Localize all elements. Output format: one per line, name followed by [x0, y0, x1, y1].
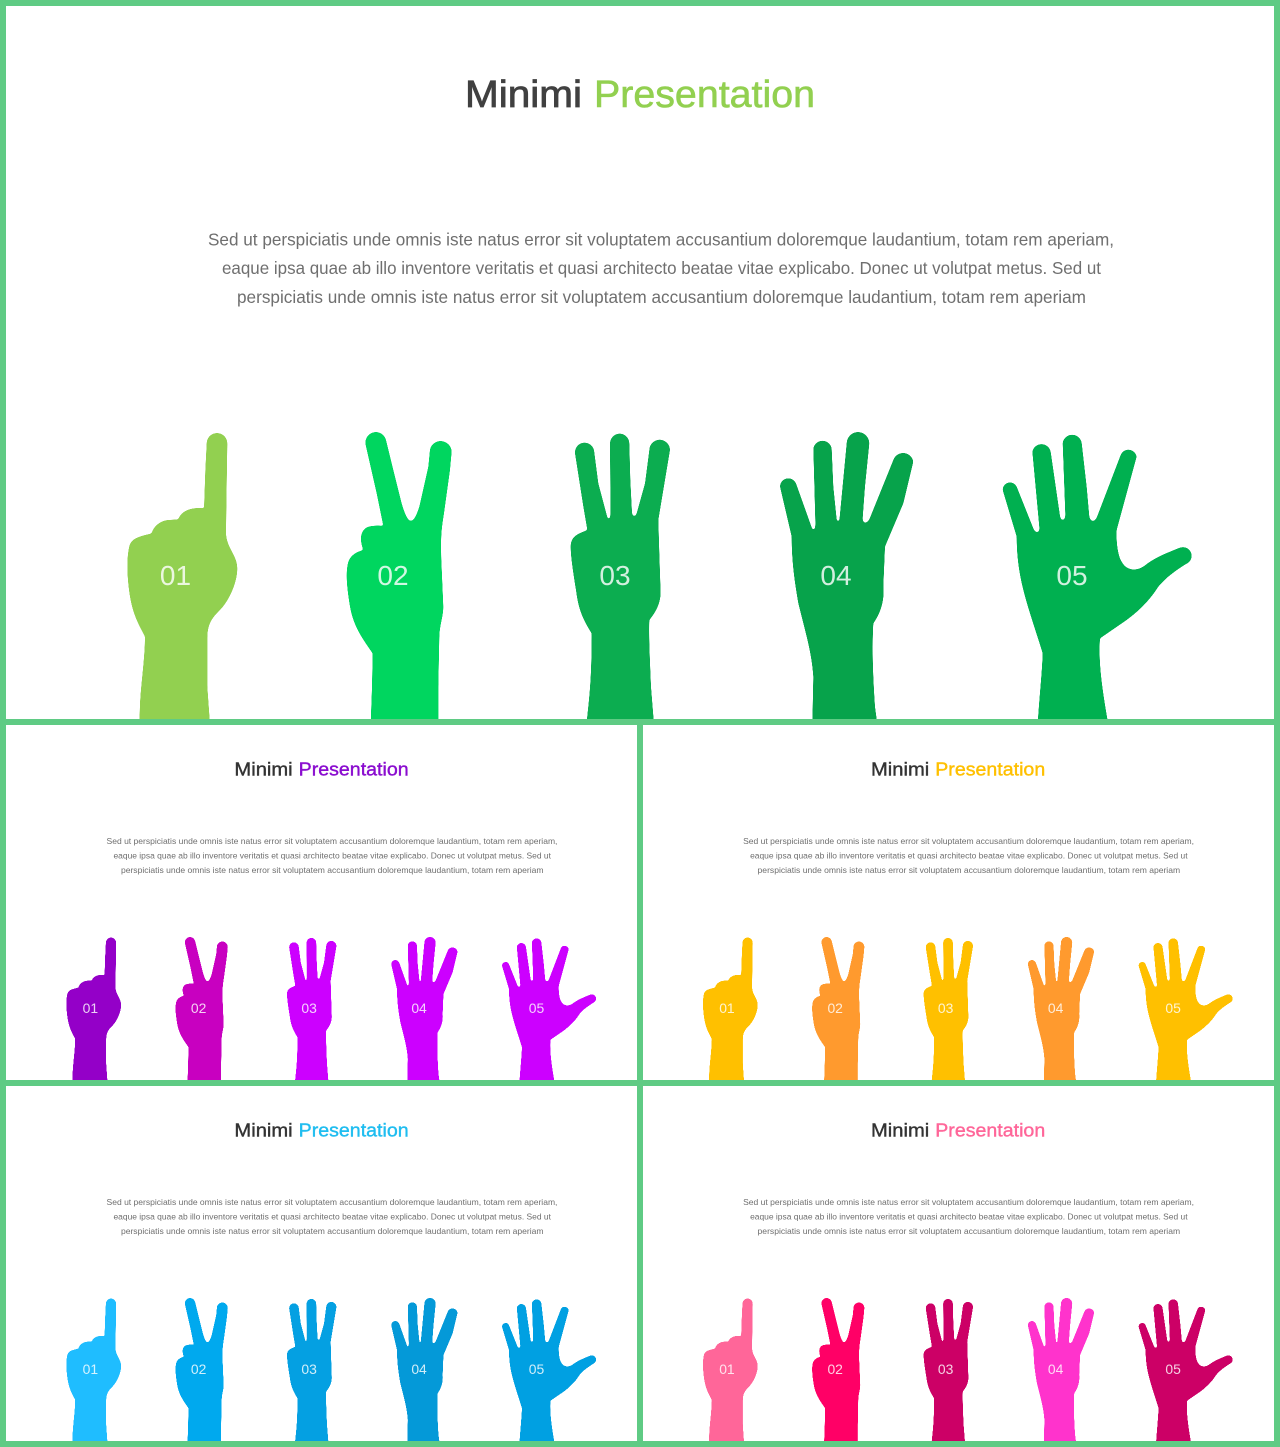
hand 01: 01 — [83, 1000, 98, 1016]
hand 03: 03 — [938, 1000, 954, 1016]
hand 02 — [347, 432, 452, 724]
hand 04: 04 — [411, 1361, 427, 1377]
hand 01 — [66, 938, 121, 1082]
hand 01 — [66, 1299, 121, 1443]
hand 02: 02 — [827, 1361, 843, 1377]
title — [465, 74, 815, 116]
title: Minimi — [871, 1120, 929, 1141]
hand 04 — [391, 937, 458, 1082]
body text: perspiciatis unde omnis iste natus error sit voluptatem accusantium doloremque laudantium, totam rem aperiam — [237, 287, 1086, 307]
hand 04 — [1028, 937, 1094, 1082]
body text: perspiciatis unde omnis iste natus error sit voluptatem accusantium doloremque laudantium, totam rem aperiam — [758, 1226, 1180, 1236]
hand 02: 02 — [191, 1361, 207, 1377]
body text: Sed ut perspiciatis unde omnis iste natus error sit voluptatem accusantium doloremque laudantium, totam rem aperiam, — [743, 1197, 1194, 1207]
hand 04: 04 — [411, 1000, 427, 1016]
body text: perspiciatis unde omnis iste natus error sit voluptatem accusantium doloremque laudantium, totam rem aperiam — [121, 1226, 544, 1236]
title — [871, 1120, 1045, 1141]
hand 05 — [1139, 1299, 1233, 1443]
hand 05: 05 — [1056, 560, 1088, 591]
hand 02 — [176, 1298, 228, 1443]
hand 01 — [703, 1299, 758, 1443]
hand 02: 02 — [827, 1000, 843, 1016]
hand 05: 05 — [1165, 1000, 1181, 1016]
title: Minimi — [871, 759, 929, 780]
body text: Sed ut perspiciatis unde omnis iste natus error sit voluptatem accusantium doloremque laudantium, totam rem aperiam, — [107, 1197, 557, 1207]
hand 05 — [1003, 435, 1192, 724]
hand 04 — [780, 432, 913, 724]
hand 05: 05 — [529, 1000, 545, 1016]
body text: perspiciatis unde omnis iste natus error sit voluptatem accusantium doloremque laudantium, totam rem aperiam — [758, 865, 1180, 875]
hand 03: 03 — [599, 560, 631, 591]
panel: purple slide — [66, 759, 596, 1082]
hand 01 — [703, 938, 758, 1082]
hand 05 — [502, 1299, 596, 1443]
body text — [107, 836, 557, 875]
hand 03: 03 — [301, 1000, 317, 1016]
body text: eaque ipsa quae ab illo inventore veritatis et quasi architecto beatae vitae explicabo. Donec ut volutpat metus. Sed ut — [113, 850, 552, 860]
hand 04 — [1028, 1298, 1094, 1443]
title: Presentation — [594, 74, 815, 116]
hand 03 — [287, 938, 336, 1082]
hand 02 — [812, 1298, 864, 1443]
hand 03 — [287, 1299, 336, 1443]
hand 02 — [176, 937, 228, 1082]
panel: main green slide — [127, 74, 1192, 724]
hand 01: 01 — [83, 1361, 98, 1377]
title — [871, 759, 1045, 780]
body text: Sed ut perspiciatis unde omnis iste natus error sit voluptatem accusantium doloremque laudantium, totam rem aperiam, — [107, 836, 557, 846]
hand 05: 05 — [529, 1361, 545, 1377]
hand 04 — [391, 1298, 458, 1443]
hand 03: 03 — [301, 1361, 317, 1377]
title: Presentation — [935, 759, 1045, 780]
hand 02: 02 — [377, 560, 409, 591]
panel: blue slide — [66, 1120, 596, 1443]
title — [234, 1120, 409, 1141]
body text: eaque ipsa quae ab illo inventore veritatis et quasi architecto beatae vitae explicabo. Donec ut volutpat metus. Sed ut — [113, 1211, 552, 1221]
hand 03 — [571, 434, 670, 724]
title: Minimi — [234, 759, 293, 780]
hand 01: 01 — [719, 1361, 735, 1377]
body text — [743, 1197, 1194, 1236]
body text: eaque ipsa quae ab illo inventore veritatis et quasi architecto beatae vitae explicabo. Donec ut volutpat metus. Sed ut — [222, 258, 1101, 278]
title: Minimi — [465, 74, 582, 116]
hand 04: 04 — [1048, 1361, 1064, 1377]
hand 01: 01 — [160, 560, 191, 591]
hand 01: 01 — [719, 1000, 735, 1016]
title: Presentation — [299, 759, 409, 780]
hand 04: 04 — [820, 560, 852, 591]
hand 03: 03 — [938, 1361, 954, 1377]
hand 02 — [812, 937, 864, 1082]
body text — [743, 836, 1194, 875]
body text: Sed ut perspiciatis unde omnis iste natus error sit voluptatem accusantium doloremque laudantium, totam rem aperiam, — [743, 836, 1194, 846]
title — [234, 759, 409, 780]
hand 05: 05 — [1165, 1361, 1181, 1377]
hand 01 — [127, 433, 237, 724]
panel: yellow slide — [703, 759, 1233, 1082]
hand 05 — [502, 938, 596, 1082]
hand 03 — [924, 1299, 973, 1443]
hand 05 — [1139, 938, 1233, 1082]
hand 03 — [924, 938, 973, 1082]
body text: eaque ipsa quae ab illo inventore veritatis et quasi architecto beatae vitae explicabo. Donec ut volutpat metus. Sed ut — [750, 850, 1188, 860]
body text — [208, 230, 1114, 307]
title: Presentation — [299, 1120, 409, 1141]
body text — [107, 1197, 557, 1236]
panel: pink slide — [703, 1120, 1233, 1443]
title: Minimi — [234, 1120, 293, 1141]
body text: eaque ipsa quae ab illo inventore veritatis et quasi architecto beatae vitae explicabo. Donec ut volutpat metus. Sed ut — [750, 1211, 1188, 1221]
hand 04: 04 — [1048, 1000, 1064, 1016]
body text: perspiciatis unde omnis iste natus error sit voluptatem accusantium doloremque laudantium, totam rem aperiam — [121, 865, 544, 875]
hand 02: 02 — [191, 1000, 207, 1016]
title: Presentation — [935, 1120, 1045, 1141]
body text: Sed ut perspiciatis unde omnis iste natus error sit voluptatem accusantium doloremque laudantium, totam rem aperiam, — [208, 230, 1114, 250]
